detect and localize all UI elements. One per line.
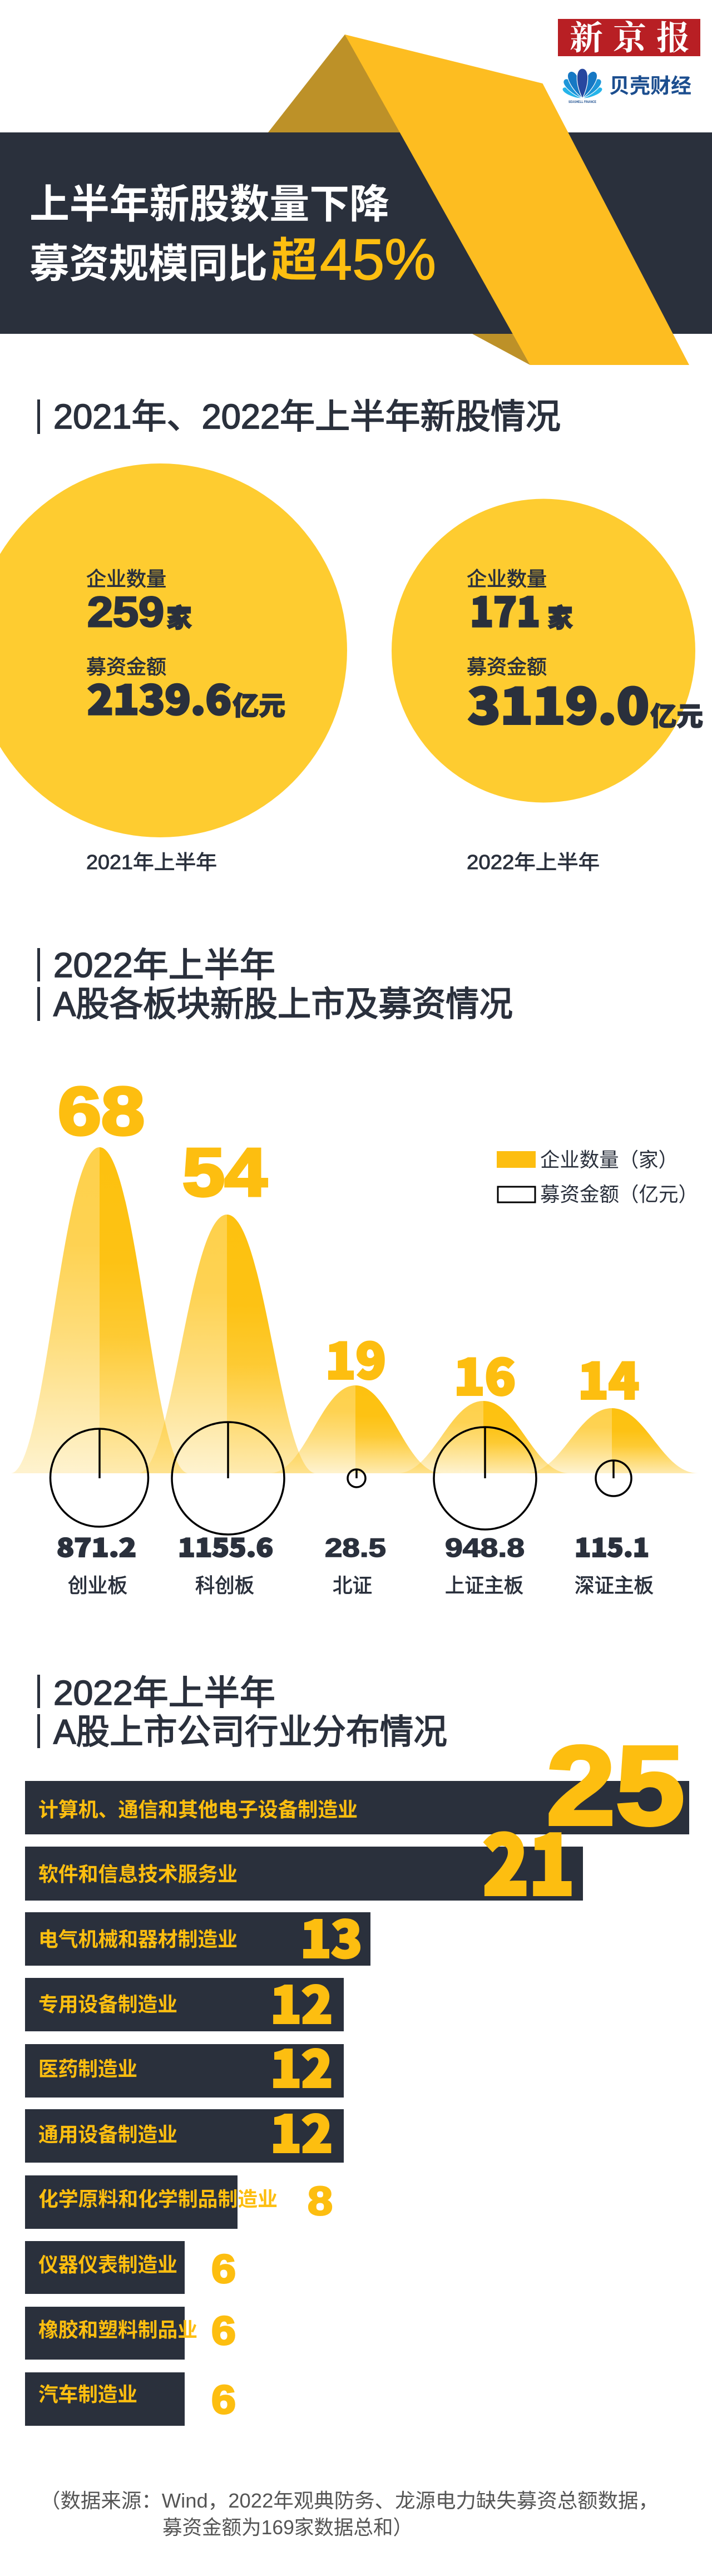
bar: 软件 21: 21 (483, 1801, 575, 1918)
bar: 计算机 25: 计算机、通信和其他电子设备制造业 (38, 1798, 358, 1821)
header banner (0, 34, 712, 365)
panel: 2021 first half circle: 亿元 (233, 684, 285, 723)
panel: 2021 first half circle (0, 463, 347, 874)
bar: 医药 12: 12 (270, 2029, 333, 2101)
ribbon back fold top (268, 34, 402, 132)
logo: 贝壳财经: SEASHELL FINANCE (568, 101, 596, 104)
fund values: 1155.6 (178, 1528, 273, 1564)
bar: 橡胶 6: 6 (211, 2309, 236, 2353)
bar: 电气 13 (25, 1899, 370, 1972)
board names: 北证 (333, 1574, 372, 1597)
bar: 计算机 25: 25 (546, 1723, 685, 1848)
bar: 化学 8 (25, 2175, 333, 2229)
panel: 2021 first half circle: 企业数量 (86, 567, 166, 590)
logo: 新京报: 新京报 (570, 12, 700, 60)
bar: 仪器 6: 仪器仪表制造业 (38, 2253, 177, 2276)
bar: 化学 8: 化学原料和化学制品制造业 (38, 2188, 278, 2210)
source note: （数据来源：Wind，2022年观典防务、龙源电力缺失募资总额数据， (40, 2489, 659, 2512)
panel: 2021 first half circle: 家 (166, 598, 192, 635)
title: 募资规模同比 (29, 242, 268, 287)
title (29, 182, 436, 292)
bell: 深证主板 14 (526, 1408, 698, 1473)
fund values: 948.8 (445, 1533, 525, 1562)
bar: 软件 21 (25, 1801, 583, 1918)
panel: 2022 first half circle: 募资金额 (467, 655, 547, 678)
fund circles (50, 1422, 631, 1534)
bar: 橡胶 6 (25, 2307, 236, 2360)
bar: 通用 12 (25, 2094, 344, 2167)
bar: 汽车 6 (25, 2372, 236, 2426)
title: 45% (320, 228, 436, 292)
bell: 北证 19 (269, 1385, 442, 1473)
fund values: 871.2 (57, 1528, 136, 1564)
board names: 上证主板 (445, 1574, 523, 1597)
bar chart: industry distribution (25, 1723, 689, 2426)
bar: 通用 12: 通用设备制造业 (38, 2123, 177, 2146)
heading: A股上市公司行业分布情况: A股上市公司行业分布情况 (53, 1713, 447, 1751)
dark title band (0, 132, 712, 334)
yellow ribbon (345, 34, 689, 365)
heading: A股各板块: A股各板块新股上市及募资情况 (53, 985, 513, 1024)
bar: 医药 12: 医药制造业 (38, 2057, 137, 2080)
logo: 贝壳财经: 贝壳财经 (609, 75, 691, 97)
bell: 创业板 68 (11, 1147, 189, 1473)
bar: 仪器 6: 6 (211, 2247, 236, 2292)
source note: 募资金额为169家数据总和） (162, 2516, 413, 2539)
fund values: 28.5 (325, 1533, 386, 1562)
fund values: 115.1 (575, 1528, 649, 1564)
chart: listings and funds by board (11, 1073, 698, 1597)
logo: 贝壳财经 (561, 68, 691, 104)
bar: 专用 12: 专用设备制造业 (38, 1993, 177, 2016)
legend: 企业数量（家） (540, 1148, 678, 1171)
bar: 化学 8: 8 (308, 2179, 333, 2224)
bar: 汽车 6: 6 (211, 2378, 236, 2422)
company counts (58, 1073, 639, 1413)
panel: 2021 first half circle: 募资金额 (86, 655, 166, 678)
source note (40, 2489, 659, 2539)
bar: 汽车 6: 汽车制造业 (38, 2383, 137, 2406)
board names: 科创板 (195, 1574, 254, 1597)
bar: 专用 12: 12 (270, 1965, 333, 2037)
bar: 橡胶 6: 橡胶和塑料制品业 (38, 2318, 197, 2341)
panel: 2022 first half circle: 企业数量 (467, 567, 547, 590)
panel: 2022 first half circle: 亿元 (650, 695, 703, 733)
panel: 2022 first half circle: 171 (470, 580, 540, 638)
label: 2022: 2022年上半年 (467, 851, 600, 874)
ribbon back fold bottom (472, 334, 530, 365)
bar: 软件 21: 软件和信息技术服务业 (38, 1863, 238, 1886)
bar: 电气 13: 电气机械和器材制造业 (38, 1928, 238, 1951)
fund values (57, 1528, 649, 1564)
bar: 计算机 25 (25, 1723, 689, 1848)
heading: A股各板块: 2022年上半年 (53, 946, 275, 985)
heading: A股上市公司行业分布情况: 2022年上半年 (53, 1674, 275, 1713)
bar: 通用 12: 12 (270, 2094, 333, 2167)
heading: 2021年、2022年上半年新股情况: 2021年、2022年上半年新股情况 (53, 398, 561, 436)
bar: 专用 12 (25, 1965, 344, 2037)
bar: 电气 13: 13 (300, 1899, 362, 1972)
heading: A股各板块 (37, 946, 513, 1024)
board names (68, 1574, 654, 1597)
company counts: 16 (454, 1339, 516, 1409)
panel: 2022 first half circle: 3119.0 (468, 668, 649, 738)
company counts: 19 (325, 1322, 386, 1393)
company counts: 68 (58, 1073, 145, 1149)
legend: 募资金额（亿元） (540, 1183, 698, 1206)
bar: 医药 12 (25, 2029, 344, 2101)
bell: 科创板 54 (138, 1215, 316, 1473)
bar: 仪器 6 (25, 2241, 236, 2294)
company counts: 54 (182, 1134, 267, 1210)
panel: 2021 first half circle: 259 (87, 589, 164, 636)
title: 上半年新股数量下降 (29, 182, 389, 227)
panel: 2022 first half circle: 家 (547, 598, 573, 635)
title: 超 (271, 234, 318, 287)
board names: 深证主板 (575, 1574, 654, 1597)
company counts: 14 (578, 1343, 639, 1413)
bell: 上证主板 16 (397, 1401, 570, 1473)
panel: 2022 first half circle (392, 499, 703, 874)
label: 2021: 2021年上半年 (86, 851, 217, 874)
legend (497, 1148, 698, 1206)
board names: 创业板 (68, 1574, 127, 1597)
heading: A股上市公司行业分布情况 (37, 1674, 447, 1751)
panel: 2021 first half circle: 2139.6 (87, 668, 231, 726)
